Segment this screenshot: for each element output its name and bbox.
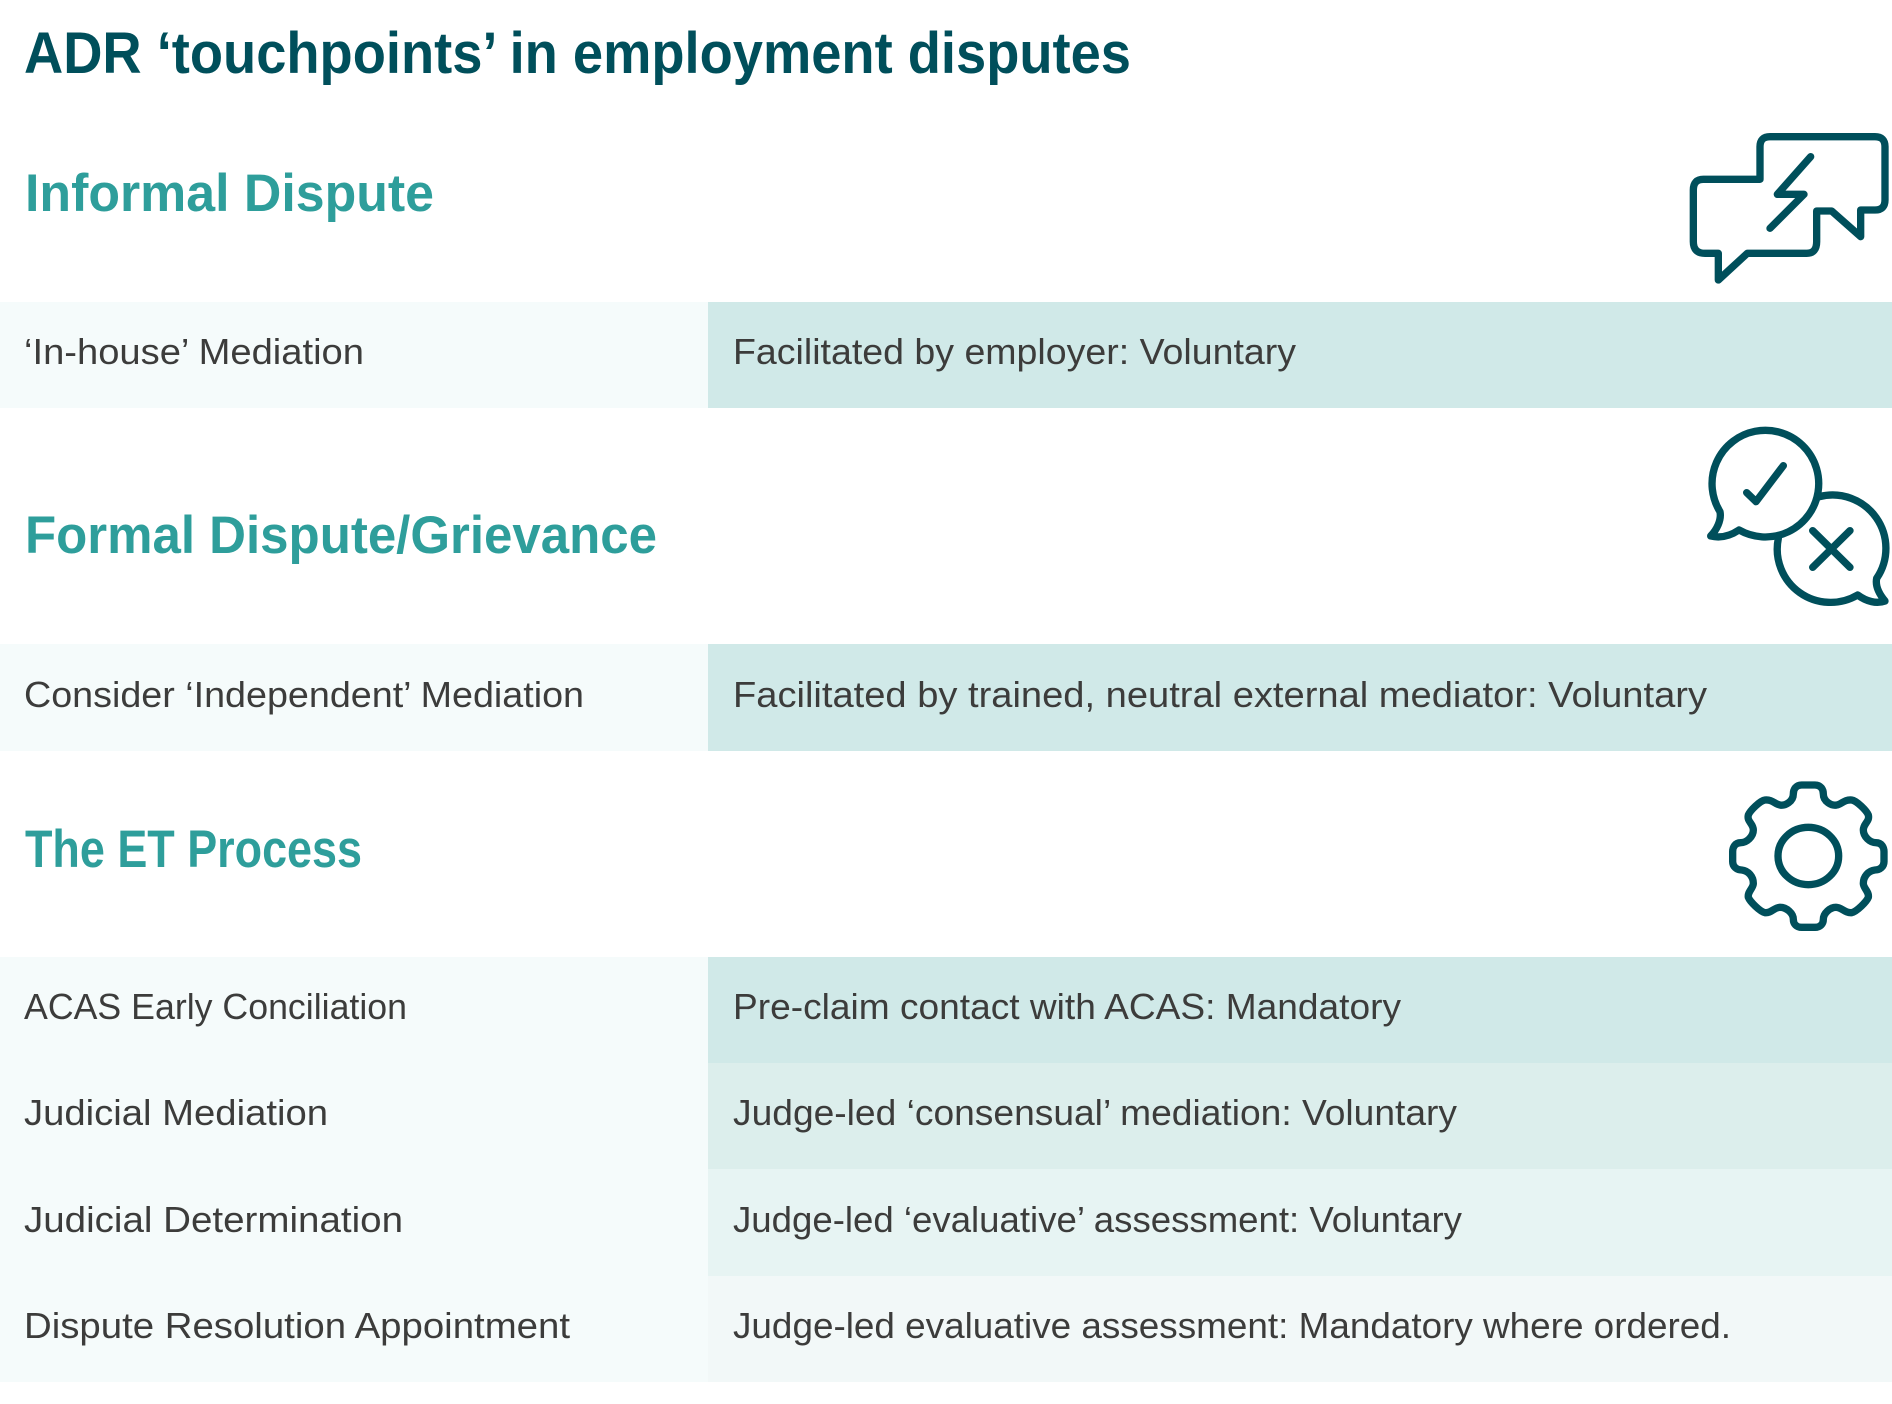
row: independent mediation	[0, 644, 1892, 751]
left column background	[0, 957, 708, 1382]
row: independent mediation: Facilitated by trained, neutral external mediator: Voluntary	[733, 674, 1707, 715]
row: judicial determination: Judge-led ‘evaluative’ assessment: Voluntary	[733, 1199, 1462, 1240]
row: judicial determination	[24, 1169, 1892, 1276]
row: in-house mediation	[0, 302, 1892, 408]
icon: tick and cross speech bubbles	[1711, 430, 1886, 602]
row: judicial mediation: Judge-led ‘consensual’ mediation: Voluntary	[733, 1092, 1457, 1133]
heading: informal dispute: Informal Dispute	[25, 164, 434, 223]
row: independent mediation: Consider ‘Independent’ Mediation	[24, 674, 584, 715]
icon: gear	[1733, 785, 1884, 927]
row: ACAS early conciliation: ACAS Early Conciliation	[24, 986, 407, 1027]
panel: formal dispute	[0, 430, 1892, 751]
row: ACAS early conciliation: Pre-claim contact with ACAS: Mandatory	[733, 986, 1401, 1027]
panel: informal dispute	[0, 137, 1892, 408]
heading: the ET process: The ET Process	[25, 820, 362, 879]
row: in-house mediation: ‘In-house’ Mediation	[24, 331, 364, 372]
row: judicial determination: Judicial Determination	[24, 1199, 403, 1240]
row: ACAS early conciliation	[24, 957, 1892, 1063]
panel: the ET process	[0, 785, 1892, 1382]
row: in-house mediation: Facilitated by employer: Voluntary	[733, 331, 1296, 372]
row: judicial mediation: Judicial Mediation	[24, 1092, 328, 1133]
icon: clashing speech bubbles	[1693, 137, 1885, 280]
title: ADR ‘touchpoints’ in employment disputes	[24, 21, 1131, 86]
row: dispute resolution appointment	[24, 1276, 1892, 1382]
row: dispute resolution appointment: Dispute Resolution Appointment	[24, 1305, 570, 1346]
row: dispute resolution appointment: Judge-led evaluative assessment: Mandatory where ordered.	[733, 1305, 1731, 1346]
row: judicial mediation	[24, 1063, 1892, 1169]
heading: formal dispute: Formal Dispute/Grievance	[25, 506, 657, 565]
